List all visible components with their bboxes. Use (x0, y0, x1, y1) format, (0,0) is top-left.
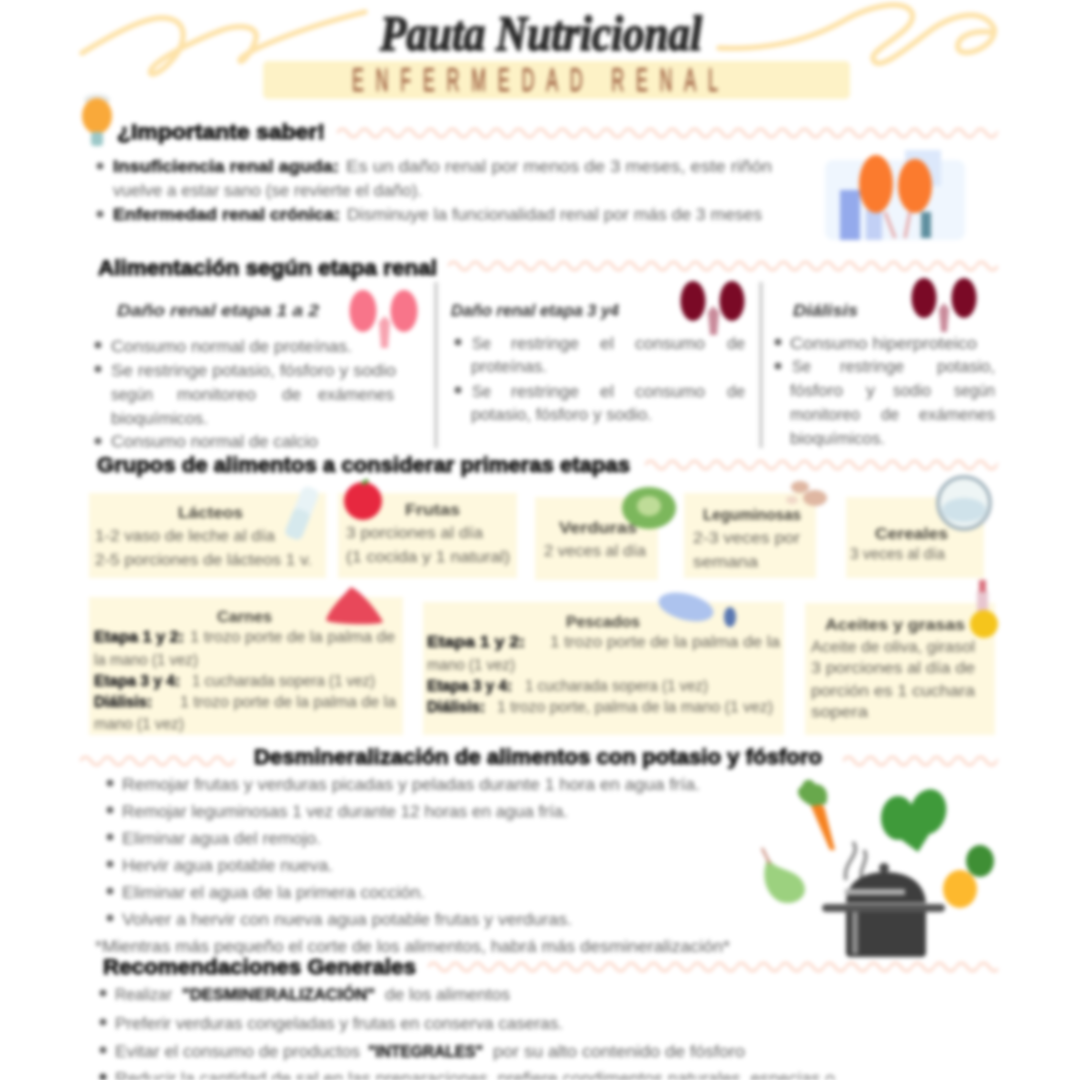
heading: importante saber: ¿Importante saber! (117, 121, 325, 144)
panel: etapa 1 a 2: monitoreo (177, 385, 256, 404)
panel: etapa 3 y 4 (451, 281, 745, 424)
icon: orange (943, 870, 977, 908)
heading: desmineralización: Desmineralización de alimentos con potasio y fósforo (254, 746, 822, 769)
icon: pear (762, 848, 805, 903)
panel: diálisis: y (866, 381, 876, 400)
panel: diálisis: fósforo (790, 381, 843, 400)
card: pescados: Etapa 1 y 2: (427, 634, 525, 651)
card: carnes: Diálisis: (94, 694, 152, 711)
panel: etapa 1 a 2: Consumo normal de calcio (111, 432, 318, 451)
icon: light bulb (82, 94, 112, 146)
list: pasos de desmineralización: Remojar leguminosas 1 vez durante 12 horas en agua fría. (122, 802, 568, 821)
panel: etapa 3 y 4: el (600, 382, 614, 401)
list: pasos de desmineralización: Hervir agua potable nueva. (122, 856, 333, 875)
card: pescados: mano (1 vez) (427, 657, 515, 674)
list: pasos de desmineralización: Eliminar agua del remojo. (122, 829, 321, 848)
card: verduras: 2 veces al día (544, 543, 646, 560)
list: pasos de desmineralización (106, 775, 700, 929)
card: carnes: Etapa 3 y 4: (94, 673, 180, 690)
panel: diálisis (774, 278, 995, 448)
icon: pink kidneys (350, 290, 418, 348)
panel: etapa 3 y 4: restringe (511, 334, 579, 353)
card: verduras: Verduras (559, 520, 637, 537)
panel: etapa 3 y 4: proteínas. (471, 357, 547, 376)
card: frutas: 3 porciones al día (346, 525, 483, 542)
right decorative swirl (719, 5, 994, 63)
card: lácteos (89, 485, 326, 578)
panel: diálisis: restringe (840, 357, 904, 376)
panel: etapa 1 a 2: según (111, 385, 153, 404)
list: recomendaciones generales: Evitar el consumo de productos (115, 1042, 360, 1061)
icon: milk bottle (284, 485, 320, 541)
icon: dark kidneys dialysis (912, 278, 976, 332)
icon: carrot (798, 780, 835, 850)
card: frutas (338, 480, 517, 578)
list: recomendaciones generales: de los alimentos (385, 985, 510, 1004)
card: pescados: 1 trozo porte de la palma de la (550, 634, 780, 651)
text: insuficiencia renal aguda: vuelve a estar sano (se revierte el daño). (113, 181, 422, 200)
left decorative swirl (82, 12, 365, 74)
text: insuficiencia renal aguda: Es un daño renal por menos de 3 meses, este riñón (346, 157, 772, 176)
list: recomendaciones generales: "INTEGRALES" (368, 1042, 483, 1061)
card: cereales: Cereales (875, 526, 948, 543)
panel: etapa 3 y 4: Se (472, 334, 491, 353)
panel: etapa 3 y 4: de (727, 334, 745, 353)
panel: diálisis: Se (792, 357, 811, 376)
card: carnes: Carnes (217, 609, 272, 626)
panel: etapa 1 a 2 (94, 290, 418, 451)
panel: etapa 3 y 4: consumo (635, 382, 705, 401)
panel: etapa 3 y 4: consumo (635, 334, 705, 353)
text: insuficiencia renal aguda: Insuficiencia renal aguda: (113, 157, 339, 176)
card: aceites y grasas: porción es 1 cuchara (811, 683, 975, 700)
card: aceites y grasas: Aceites y grasas (825, 617, 965, 634)
panel: importante saber (96, 121, 998, 224)
list: recomendaciones generales: "DESMINERALIZACIÓN" (182, 985, 375, 1004)
icon: leaf (966, 845, 994, 877)
list: pasos de desmineralización: Remojar frutas y verduras picadas y peladas durante 1 hora en agua fría. (122, 775, 700, 794)
panel: etapa 1 a 2: de (282, 385, 301, 404)
icon: apple (344, 480, 382, 520)
text: enfermedad renal crónica: Disminuye la funcionalidad renal por más de 3 meses (347, 205, 762, 224)
icon: lettuce (622, 487, 676, 529)
panel: diálisis: bioquímicos. (790, 429, 885, 448)
card: leguminosas: semana (693, 554, 758, 571)
card: pescados: 1 cucharada sopera (1 vez) (525, 678, 708, 695)
card: cereales: 3 veces al día (850, 546, 945, 563)
card: leguminosas: Leguminosas (703, 507, 801, 524)
card: pescados: 1 trozo porte, palma de la mano (1 vez) (497, 699, 773, 716)
heading: diálisis: Diálisis (793, 301, 858, 320)
list: recomendaciones generales (100, 985, 835, 1080)
text: insuficiencia renal aguda (96, 157, 772, 200)
note: corte de alimentos: *Mientras más pequeño el corte de los alimentos, habrá más desmineralización* (95, 937, 730, 956)
list: recomendaciones generales: Realizar (115, 985, 172, 1004)
panel: etapa 1 a 2: Consumo normal de proteínas. (111, 337, 352, 356)
card: carnes: 1 trozo porte de la palma de la (180, 694, 396, 711)
card: cereales (846, 477, 990, 578)
icon: pot (822, 863, 945, 957)
icon: medical kidney illustration (825, 150, 965, 240)
heading: recomendaciones generales: Recomendaciones Generales (103, 956, 416, 979)
list: pasos de desmineralización: Eliminar el agua de la primera cocción. (122, 883, 425, 902)
card: carnes: Etapa 1 y 2: (94, 629, 184, 646)
panel: diálisis: potasio, (937, 357, 995, 376)
card: carnes: la mano (1 vez) (94, 652, 198, 669)
panel: diálisis: exámenes (919, 405, 995, 424)
card: frutas: Frutas (405, 502, 460, 519)
panel: etapa 1 a 2: exámenes (318, 385, 394, 404)
icon: steam (845, 842, 866, 880)
illustration: pot with vegetables (762, 780, 994, 957)
subtitle banner (263, 61, 850, 99)
panel: etapa 3 y 4: restringe (511, 382, 579, 401)
icon: legumes (786, 481, 827, 506)
panel: diálisis: según (954, 381, 995, 400)
card: aceites y grasas (805, 580, 998, 735)
heading: alimentación según etapa renal: Alimentación según etapa renal (98, 257, 437, 280)
title: Pauta Nutricional (379, 5, 702, 61)
icon: spinach (881, 785, 951, 852)
list: recomendaciones generales: Preferir verduras congeladas y frutas en conserva caseras. (115, 1014, 563, 1033)
heading: daño renal etapa 1 a 2: Daño renal etapa 1 a 2 (117, 301, 320, 320)
icon: oil bottle (970, 580, 998, 638)
panel: etapa 3 y 4: el (600, 334, 614, 353)
icon: meat (326, 587, 383, 624)
card: lácteos: 1-2 vaso de leche al día (95, 528, 275, 545)
panel: etapa 3 y 4: potasio, fósforo y sodio. (471, 405, 652, 424)
list: recomendaciones generales: por su alto contenido de fósforo (493, 1042, 745, 1061)
panel: diálisis: sodio (893, 381, 931, 400)
text: enfermedad renal crónica: Enfermedad renal crónica: (113, 205, 340, 224)
card: leguminosas: 2-3 veces por (693, 530, 800, 547)
heading: grupos de alimentos: Grupos de alimentos a considerar primeras etapas (97, 454, 630, 477)
list: pasos de desmineralización: Volver a hervir con nueva agua potable frutas y verduras. (122, 910, 572, 929)
card: carnes: 1 trozo porte de la palma de (190, 629, 395, 646)
text: enfermedad renal crónica (96, 205, 762, 224)
icon: bowl (938, 477, 990, 529)
card: carnes (89, 587, 403, 735)
card: carnes: mano (1 vez) (94, 716, 184, 733)
panel: etapa 3 y 4: de (727, 382, 745, 401)
subtitle banner: ENFERMEDAD RENAL (352, 64, 718, 98)
card: lácteos: Lácteos (178, 505, 243, 522)
panel: diálisis: monitoreo (790, 405, 860, 424)
panel: etapa 1 a 2: Se restringe potasio, fósforo y sodio (111, 361, 396, 380)
card: lácteos: 2-5 porciones de lácteos 1 v. (95, 552, 312, 569)
icon: fish (656, 588, 736, 627)
panel: etapa 1 a 2: bioquímicos. (111, 409, 208, 428)
card: pescados: Etapa 3 y 4: (427, 678, 512, 695)
card: aceites y grasas: 3 porciones al día de (811, 660, 975, 677)
card: leguminosas (684, 481, 827, 578)
card: carnes: 1 cucharada sopera (1 vez) (192, 673, 375, 690)
card: pescados: Diálisis: (427, 699, 485, 716)
panel: diálisis: Consumo hiperproteico (790, 334, 977, 353)
card: pescados (423, 588, 784, 735)
heading: daño renal etapa 3 y 4: Daño renal etapa 3 y4 (451, 301, 620, 320)
panel: diálisis: de (881, 405, 899, 424)
card: aceites y grasas: sopera (811, 704, 868, 721)
icon: dark kidneys (680, 281, 744, 335)
card: frutas: (1 cocida y 1 natural) (346, 549, 510, 566)
card: pescados: Pescados (566, 614, 640, 631)
card: verduras (535, 487, 676, 580)
card: aceites y grasas: Aceite de oliva, girasol (811, 639, 975, 656)
panel: etapa 3 y 4: Se (472, 382, 491, 401)
